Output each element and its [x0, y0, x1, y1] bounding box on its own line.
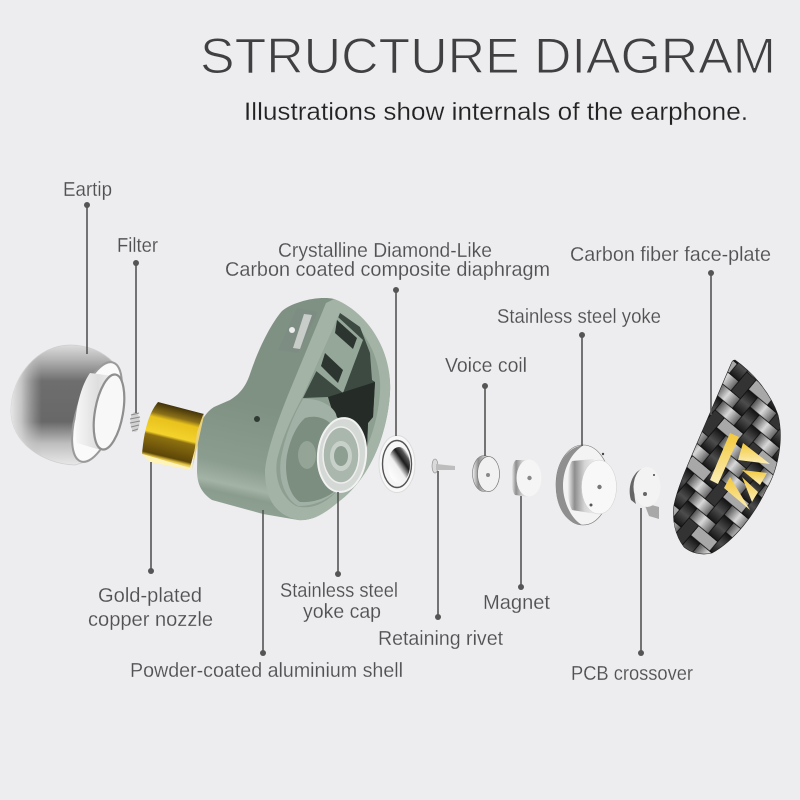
- KZ logo: [710, 433, 770, 510]
- shell vent hole: [254, 416, 260, 422]
- label: PCB crossover: PCB crossover: [571, 663, 693, 685]
- shell face rim: [265, 299, 390, 520]
- label: yoke cap: [280, 580, 398, 623]
- label: nozzle: [88, 585, 213, 631]
- label: voice coil: Voice coil: [445, 355, 527, 377]
- leader line: face-plate: [708, 270, 714, 415]
- leader line: shell: [260, 510, 266, 656]
- icon: eartip: [11, 345, 132, 468]
- icon: voice coil: [472, 456, 500, 492]
- leader line: magnet: [518, 496, 524, 590]
- label: rivet: Retaining rivet: [378, 628, 503, 650]
- label: yoke cap: Stainless steel: [280, 580, 398, 602]
- leader line: rivet: [435, 471, 441, 620]
- recessed disc: [280, 399, 350, 506]
- label: face-plate: Carbon fiber face-plate: [570, 244, 771, 266]
- label: shell: Powder-coated aluminium shell: [130, 660, 403, 682]
- subtitle: Illustrations show internals of the earphone.: [244, 98, 748, 126]
- icon: aluminium shell: [192, 298, 390, 520]
- icon: filter: [130, 412, 140, 432]
- icon: PCB crossover: [630, 467, 660, 519]
- icon: stainless steel yoke: [556, 445, 616, 525]
- leader line: filter: [133, 260, 139, 413]
- leader line: diaphragm: [393, 287, 399, 436]
- leader line: yoke cap: [335, 492, 341, 577]
- label: Eartip: Eartip: [63, 179, 112, 201]
- leader line: voice coil: [482, 383, 488, 456]
- label: yoke cap: yoke cap: [303, 601, 381, 623]
- label: diaphragm: Crystalline Diamond-Like: [278, 240, 492, 262]
- label: diaphragm: Carbon coated composite diaphragm: [225, 259, 550, 281]
- title: STRUCTURE DIAGRAM: [200, 28, 776, 84]
- label: Filter: Filter: [117, 235, 158, 257]
- shell window: [278, 308, 318, 353]
- icon: diaphragm: [379, 436, 415, 492]
- icon: magnet: [511, 460, 542, 497]
- leader line: eartip: [84, 202, 90, 354]
- icon: carbon fiber face-plate: [673, 360, 780, 554]
- shell face: [276, 313, 380, 507]
- leader line: nozzle: [148, 462, 154, 574]
- inner block: [315, 317, 363, 393]
- label: nozzle: Gold-plated: [98, 585, 202, 607]
- icon: yoke cap: [315, 416, 369, 494]
- label: diaphragm: [225, 240, 550, 281]
- leader line: yoke: [579, 332, 585, 446]
- icon: rivet: [432, 459, 455, 473]
- icon: gold nozzle: [142, 402, 205, 470]
- label: yoke: Stainless steel yoke: [497, 306, 661, 328]
- label: nozzle: copper nozzle: [88, 609, 213, 631]
- label: magnet: Magnet: [483, 592, 550, 614]
- leader line: PCB crossover: [638, 508, 644, 656]
- shell internal cavity: [303, 313, 375, 447]
